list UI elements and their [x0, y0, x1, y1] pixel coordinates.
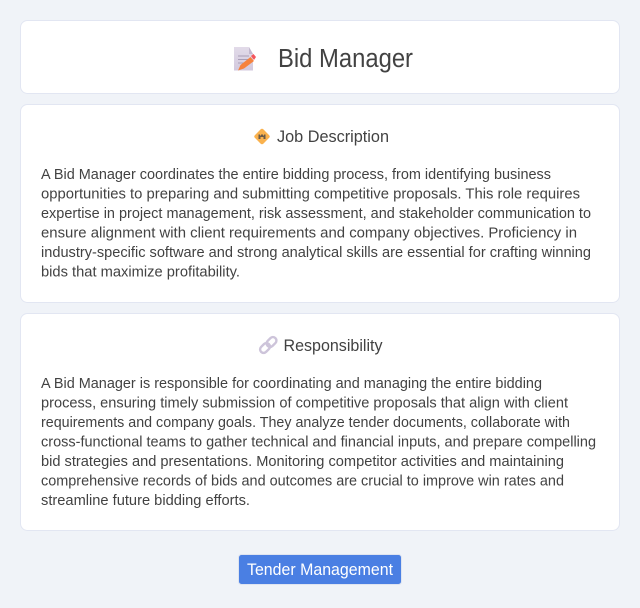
panel: responsibility	[20, 314, 620, 530]
text block: job description: A Bid Manager coordinates the entire bidding process, from identifying business	[41, 166, 551, 183]
text block: responsibility: A Bid Manager is responsible for coordinating and managing the entire bidding	[41, 375, 542, 392]
heading: job description: Job Description	[277, 127, 389, 146]
panel: job description	[20, 104, 620, 302]
text block: job description: opportunities to preparing and submitting competitive proposals. This role requires	[41, 186, 580, 202]
icon: chain link	[259, 336, 278, 354]
text block: job description: industry-specific software and strong analytical skills are essential for crafting winning	[41, 244, 591, 261]
text block: responsibility: comprehensive records of bids and outcomes are crucial to improve win rates and	[41, 472, 564, 490]
tag button: tender management: Tender Management	[247, 560, 393, 579]
text block: responsibility: bid strategies and presentations. Monitoring competitor activities and maintaining	[41, 453, 564, 470]
text block: responsibility: process, ensuring timely submission of competitive proposals that align with client	[41, 394, 569, 412]
icon: document with pencil	[234, 47, 256, 70]
title: Bid Manager	[278, 45, 413, 73]
text block: job description: expertise in project management, risk assessment, and stakeholder communication to	[41, 205, 591, 222]
icon: diamond sign	[254, 128, 270, 145]
text block: job description: ensure alignment with client requirements and company objectives. Proficiency in	[41, 224, 577, 242]
panel: title card	[20, 20, 620, 94]
tag button: tender management	[238, 554, 402, 584]
heading: responsibility: Responsibility	[284, 336, 383, 355]
text block: responsibility: streamline future bidding efforts.	[41, 492, 250, 509]
text block: responsibility: cross-functional teams to gather technical and financial inputs, and prepare compelling	[41, 434, 596, 450]
text block: job description	[41, 166, 591, 280]
text block: job description: bids that maximize profitability.	[41, 264, 240, 280]
text block: responsibility: requirements and company goals. They analyze tender documents, collaborate with	[41, 414, 570, 431]
text block: responsibility	[41, 375, 596, 509]
